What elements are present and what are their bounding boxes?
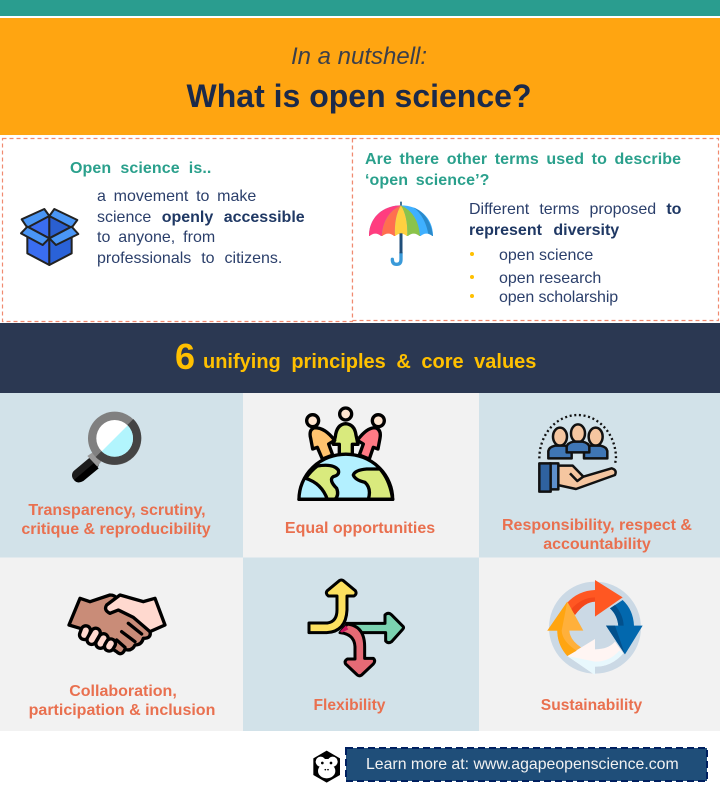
principle: equal opportunities — [243, 393, 479, 558]
principle: transparency — [0, 393, 243, 558]
label: Collaboration, — [69, 683, 177, 700]
icon: people on globe — [299, 408, 393, 499]
icon: magnifying glass — [74, 412, 141, 482]
principle: collaboration — [0, 558, 243, 731]
heading: Are there other terms used to describe — [365, 151, 681, 168]
icon: diverging arrows — [309, 580, 404, 676]
label: accountability — [543, 536, 651, 553]
panel: open science is — [2, 138, 352, 322]
icon: recycling arrows — [547, 580, 643, 675]
website link text: Learn more at: www.agapeopenscience.com — [366, 756, 679, 773]
label: Responsibility, respect & — [502, 517, 692, 534]
label: critique & reproducibility — [21, 521, 211, 538]
icon: hand holding people — [539, 415, 616, 492]
icon: open box — [21, 209, 78, 265]
title: What is open science? — [187, 78, 531, 114]
label: Equal opportunities — [285, 520, 435, 537]
bullet list — [470, 247, 618, 306]
principle: responsibility — [479, 393, 720, 558]
bullet list: open research — [499, 270, 601, 287]
banner heading: unifying principles & core values — [203, 351, 536, 373]
call to action button — [346, 748, 707, 781]
label: Sustainability — [541, 697, 643, 714]
heading: ‘open science’? — [365, 172, 490, 189]
icon: handshake — [69, 595, 165, 654]
definition text: professionals to citizens. — [97, 250, 282, 267]
bullet list: open scholarship — [499, 289, 618, 306]
label: Flexibility — [314, 697, 386, 714]
kicker: In a nutshell: — [291, 43, 427, 70]
panel: other terms — [352, 138, 718, 320]
heading: Open science is.. — [70, 160, 211, 177]
definition text: science openly accessible — [97, 209, 305, 226]
icon: rainbow umbrella — [369, 202, 433, 264]
definition text: a movement to make — [97, 188, 256, 205]
principles banner — [0, 323, 720, 393]
header panel — [0, 18, 720, 135]
icon: monkey logo — [313, 751, 340, 783]
principle: sustainability — [479, 558, 720, 731]
definition text: to anyone, from — [97, 229, 215, 246]
description text: represent diversity — [469, 222, 619, 239]
label: participation & inclusion — [29, 702, 215, 719]
top teal band — [0, 0, 720, 16]
principle: flexibility — [243, 558, 479, 731]
banner heading: 6 — [175, 336, 195, 377]
bullet list: open science — [499, 247, 593, 264]
label: Transparency, scrutiny, — [28, 502, 206, 519]
description text: Different terms proposed to — [469, 201, 681, 218]
